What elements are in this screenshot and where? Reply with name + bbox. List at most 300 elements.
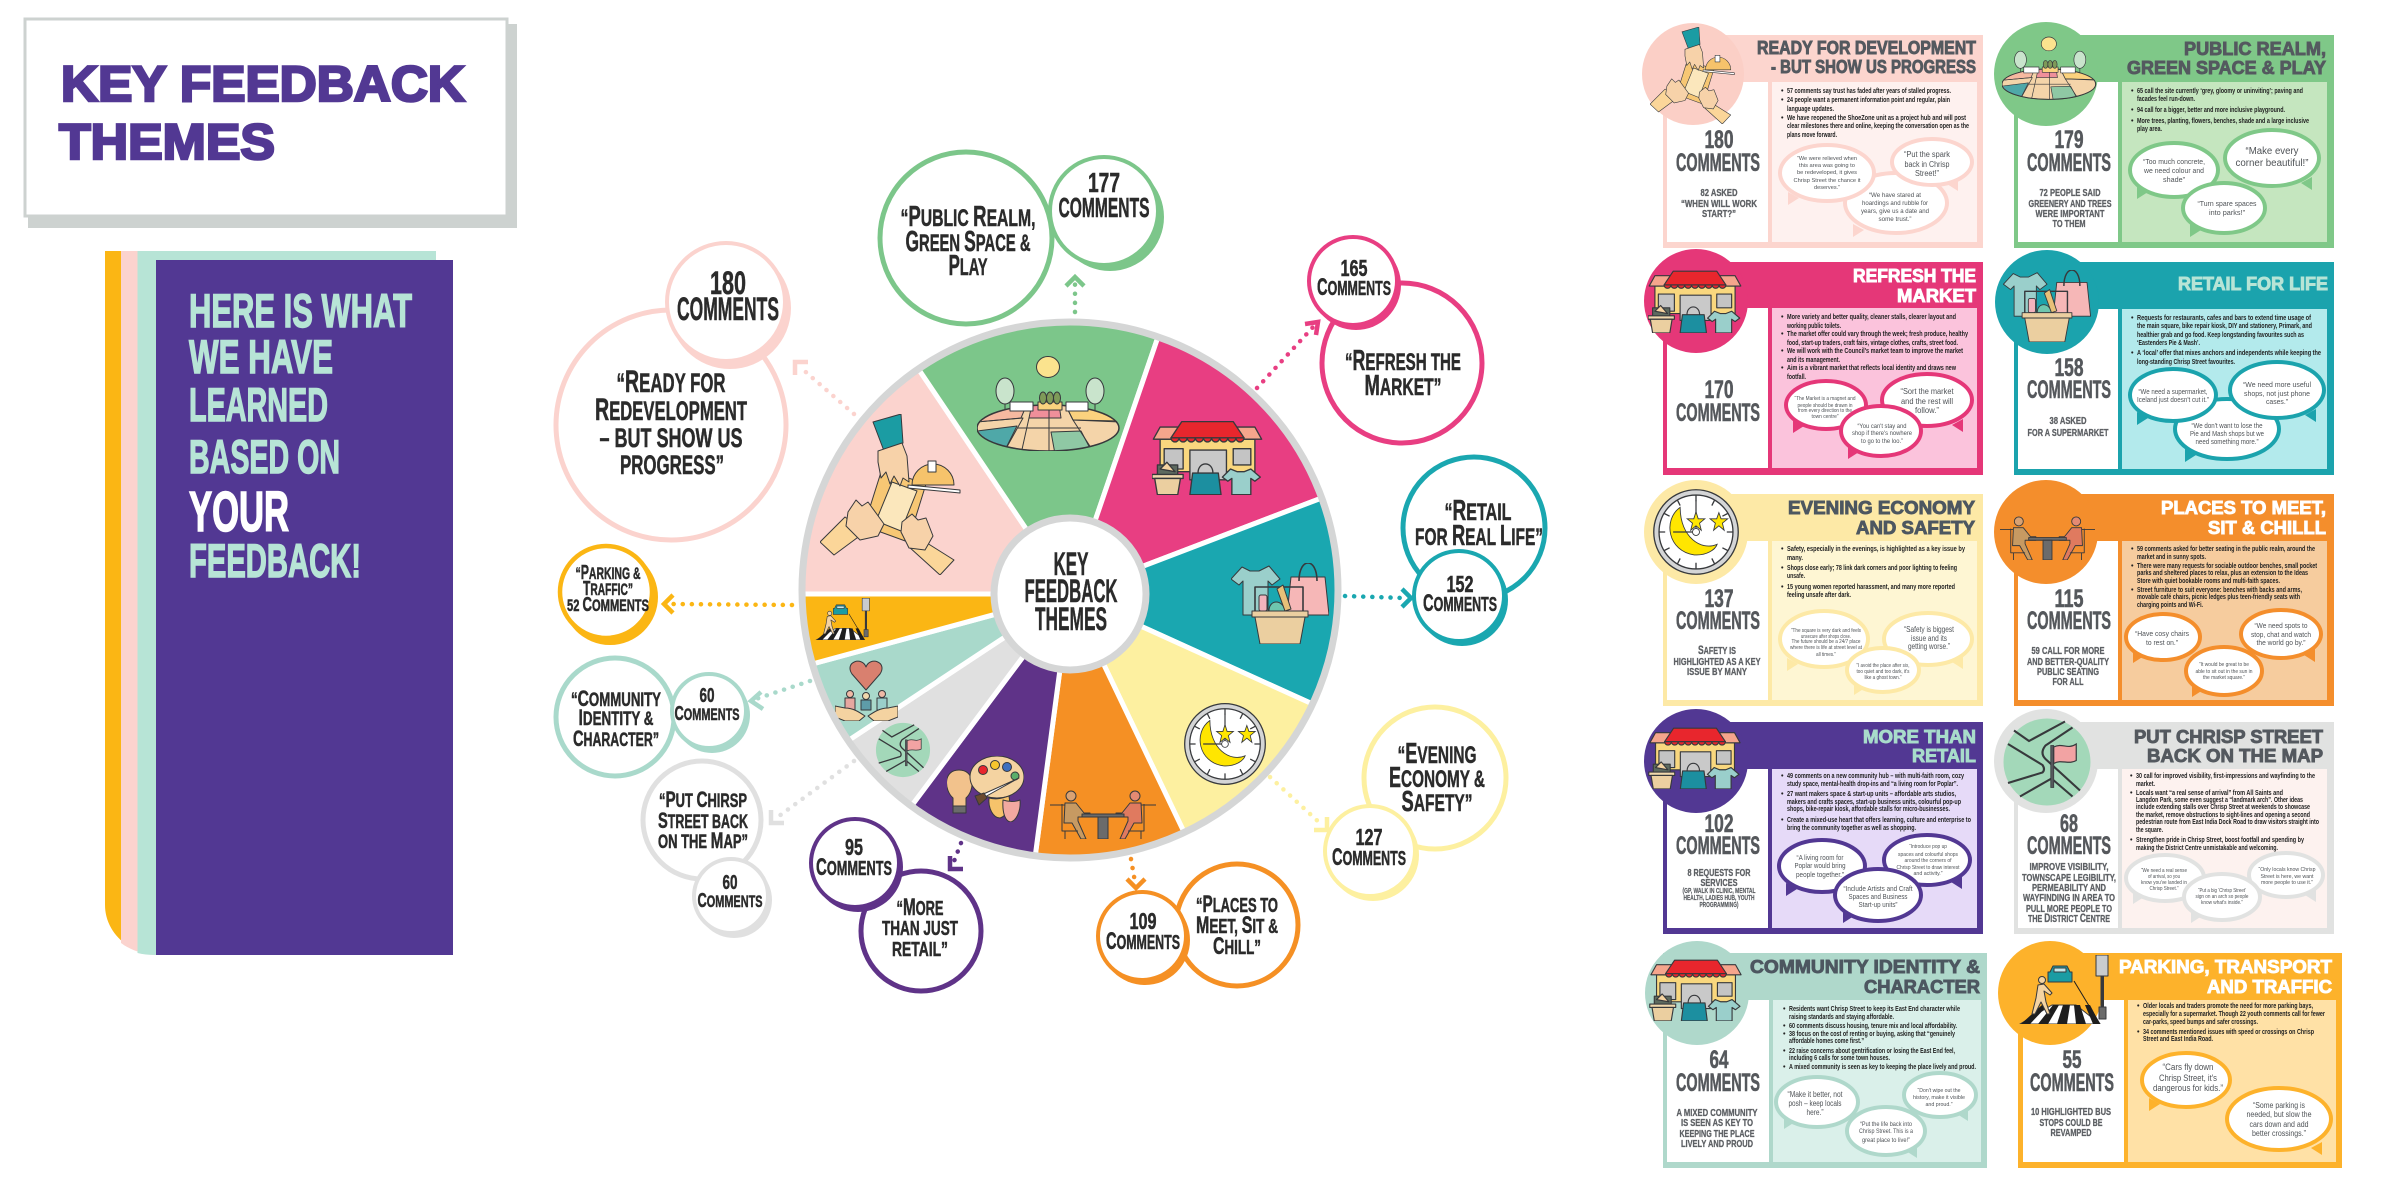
- callout: put chrisp street back on the map: [643, 761, 772, 938]
- stat: 180 comments: COMMENTS: [1676, 149, 1760, 177]
- bullet list: especially for a supermarket. Though 22 youth comments call for fewer: [2143, 1009, 2325, 1018]
- bullet list: many.: [1787, 553, 1803, 562]
- quote bubble: [2227, 1088, 2331, 1155]
- bullet list: A mixed community is seen as key to keeping the place lively and proud.: [1789, 1062, 1976, 1071]
- stat: 102 comments: COMMENTS: [1676, 832, 1760, 860]
- quote bubble: cases.”: [2266, 397, 2288, 406]
- quote bubble: “The square is very dark and feels: [1791, 628, 1861, 634]
- callout: evening economy: “EVENING: [1398, 738, 1476, 770]
- bullet list: language updates.: [1787, 104, 1834, 113]
- heading: [1853, 266, 1976, 306]
- bullet list: Street and East India Road.: [2143, 1034, 2213, 1043]
- quote bubble: all times.”: [1816, 652, 1836, 658]
- arrow: parking: [664, 595, 792, 613]
- quote bubble: Iceland just doesn't cut it.”: [2137, 397, 2210, 404]
- quote bubble: “Put the spark: [1904, 150, 1951, 159]
- quote bubble: [2175, 399, 2279, 462]
- quote bubble: [2142, 1053, 2230, 1111]
- bullet list: •: [2131, 313, 2134, 322]
- quote bubble: corner beautiful!”: [2236, 158, 2308, 169]
- quote bubble: cars down and add: [2250, 1120, 2308, 1129]
- heading: RETAIL: [1912, 746, 1976, 766]
- arrow: ready: [795, 362, 854, 414]
- callout: more than retail: COMMENTS: [816, 855, 892, 881]
- quote bubble: [1904, 1073, 1976, 1121]
- bullet list: The market offer could vary through the week; fresh produce, healthy: [1787, 329, 1968, 338]
- bullet list: There were many requests for sociable outdoor benches, small pocket: [2137, 561, 2317, 570]
- quote bubble: “Have cosy chairs: [2135, 629, 2189, 638]
- callout: retail for real life: FOR REAL LIFE”: [1415, 520, 1543, 552]
- stat: 158 comments: [2027, 354, 2111, 439]
- quote bubble: “We need a real sense: [2141, 868, 2187, 874]
- quote bubble: follow.”: [1915, 406, 1939, 415]
- quote bubble: people should be drawn in: [1798, 403, 1852, 409]
- quote bubble: where there is life at street level at: [1790, 645, 1863, 651]
- callout: retail for real life: “RETAIL: [1444, 495, 1512, 527]
- quote bubble: “Make every: [2246, 146, 2298, 157]
- stat: 68 comments: TOWNSCAPE LEGIBILITY,: [2022, 872, 2116, 884]
- arrow: chrisp street: [771, 761, 854, 823]
- quote bubble: Street!”: [1915, 169, 1939, 178]
- panel: here is what we have learned: LEARNED: [189, 378, 328, 431]
- heading: GREEN SPACE & PLAY: [2127, 58, 2326, 78]
- heading: BACK ON THE MAP: [2147, 746, 2323, 766]
- quote bubble: history, make it visible: [1913, 1095, 1965, 1101]
- stat: 64 comments: A MIXED COMMUNITY: [1676, 1107, 1758, 1119]
- quote bubble: [1884, 613, 1972, 669]
- bullet list: [2131, 544, 2317, 609]
- wheel hub: KEY: [1054, 546, 1088, 582]
- bullet list: play area.: [2137, 124, 2162, 133]
- bullet list: •: [2130, 835, 2133, 844]
- stat: 179 comments: 179: [2054, 126, 2084, 154]
- quote bubble: getting worse.”: [1908, 642, 1950, 651]
- callout: community identity: 60: [700, 685, 714, 707]
- quote bubble: from every direction to the: [1798, 408, 1852, 414]
- heading: MORE THAN: [1863, 727, 1976, 747]
- callout: community identity: CHARACTER”: [573, 726, 659, 751]
- quote bubble: shops, not just phone: [2244, 389, 2310, 398]
- quote bubble: “We need a supermarket,: [2138, 389, 2208, 396]
- wheel rim: [802, 322, 1338, 858]
- bullet list: •: [2131, 544, 2134, 553]
- bullet list: •: [2130, 788, 2133, 797]
- bullet list: We have reopened the ShoeZone unit as a project hub and will post: [1787, 113, 1966, 122]
- quote bubble: Poplar would bring: [1794, 861, 1846, 870]
- bullet list: [2131, 313, 2321, 366]
- quote bubble: Chrisp Street, it's: [2159, 1073, 2217, 1083]
- bullet list: 57 comments say trust has faded after years of stalled progress.: [1787, 86, 1951, 95]
- bullet list: market.: [2136, 779, 2155, 788]
- stat: 102 comments: 102: [1704, 810, 1734, 838]
- quote bubble: “It would be great to be: [2199, 662, 2249, 668]
- bullet list: 15 young women reported harassment, and many more reported: [1787, 582, 1955, 591]
- panel: here is what we have learned: BASED ON: [189, 430, 340, 483]
- bullet list: [1781, 544, 1965, 599]
- sector: parking and traffic: [806, 596, 994, 666]
- bullet list: Store with quiet bookable rooms and multi-faith spaces.: [2137, 576, 2280, 585]
- callout: ready for redevelopment: REDEVELOPMENT: [595, 391, 747, 427]
- quote bubble: [2126, 614, 2200, 663]
- stat: 137 comments: [1674, 585, 1760, 678]
- bullet list: working public toilets.: [1786, 321, 1841, 330]
- sector: put chrisp street on the map: [852, 640, 1024, 804]
- callout: ready for redevelopment: COMMENTS: [677, 291, 779, 327]
- heading: PARKING, TRANSPORT: [2119, 957, 2332, 977]
- quote bubble: back in Chrisp: [1904, 160, 1950, 169]
- bullet list: Shops close early; 78 link dark corners and poor lighting to feeling: [1787, 563, 1957, 572]
- quote bubble: years, give us a date and: [1861, 208, 1929, 215]
- quote bubble: and activity.”: [1914, 871, 1943, 877]
- title: [25, 19, 517, 228]
- stat: 64 comments: IS SEEN AS KEY TO: [1681, 1117, 1753, 1129]
- callout: ready for redevelopment: [556, 243, 791, 540]
- quote bubble: [2126, 855, 2204, 904]
- quote bubble: “Sort the market: [1900, 387, 1954, 396]
- quote bubble: sign on an arch so people: [2196, 894, 2249, 900]
- callout: more than retail: [811, 819, 981, 991]
- bullet list: the market, remove obstructions to sight-lines and opening a second: [2136, 810, 2310, 819]
- bullet list: food, start-up traders, craft fairs, vintage clothes, crafts, street food.: [1787, 338, 1958, 347]
- stat: 137 comments: HIGHLIGHTED AS A KEY: [1674, 656, 1760, 668]
- stat: 158 comments: COMMENTS: [2027, 376, 2111, 404]
- panel: put chrisp street back on the map: [1994, 709, 2334, 934]
- callout: put chrisp street back on the map: ON THE MAP”: [658, 828, 748, 853]
- bullet list: healthier grab and go food. Keep longstanding favourites such as: [2137, 330, 2304, 339]
- stat: 102 comments: [1676, 810, 1760, 909]
- quote bubble: [2130, 143, 2218, 199]
- stat: 64 comments: 64: [1710, 1046, 1729, 1074]
- bullet list: A ‘local’ offer that mixes anchors and independents while keeping the: [2137, 348, 2321, 357]
- bullet list: footfall.: [1787, 372, 1806, 381]
- bullet list: the square.: [2136, 825, 2163, 834]
- callout: retail for real life: COMMENTS: [1423, 591, 1497, 617]
- sector: places to meet: [1038, 664, 1185, 854]
- panel: here is what we have learned: FEEDBACK!: [189, 534, 361, 587]
- callout: evening economy: ECONOMY &: [1389, 762, 1485, 794]
- quote bubble: better crossings.”: [2252, 1129, 2306, 1138]
- stat: 55 comments: 10 HIGHLIGHTED BUS: [2031, 1106, 2111, 1118]
- bullet list: Aim is a vibrant market that reflects local identity and draws new: [1787, 363, 1956, 372]
- bullet list: •: [2131, 86, 2134, 95]
- bullet list: •: [1781, 563, 1784, 572]
- callout: public realm: GREEN SPACE &: [906, 226, 1030, 258]
- stat: 115 comments: FOR ALL: [2052, 676, 2084, 688]
- callout: public realm: COMMENTS: [1058, 192, 1150, 223]
- bullet list: 27 want makers space & start-up units – affordable arts studios,: [1787, 789, 1956, 798]
- callout: more than retail: 95: [845, 834, 863, 860]
- quote bubble: around the corners of: [1904, 858, 1952, 864]
- quote bubble: “We need more useful: [2243, 380, 2311, 389]
- quote bubble: some trust.”: [1878, 216, 1912, 223]
- bullet list: pedestrian route from East India Dock Road to draw visitors straight into: [2136, 817, 2319, 826]
- stat: 68 comments: PULL MORE PEOPLE TO: [2026, 903, 2112, 915]
- callout: put chrisp street back on the map: 60: [722, 872, 738, 894]
- quote bubble: [2241, 610, 2321, 662]
- callout: parking and traffic: [560, 546, 658, 645]
- quote bubble: stop, chat and watch: [2251, 630, 2311, 639]
- callout: public realm: “PUBLIC REALM,: [900, 201, 1036, 233]
- callout: places to meet: “PLACES TO: [1196, 892, 1278, 918]
- bullet list: 65 call the site currently ‘grey, gloomy or uninviting’; paving and: [2137, 86, 2303, 95]
- bullet list: Requests for restaurants, cafes and bars to extend time usage of: [2137, 313, 2311, 322]
- stat: 170 comments: COMMENTS: [1676, 399, 1760, 427]
- bullet list: Strengthen pride in Chrisp Street, boost footfall and spending by: [2136, 835, 2304, 844]
- bullet list: •: [2131, 585, 2134, 594]
- bullet list: •: [1781, 312, 1784, 321]
- bullet list: 60 comments discuss housing, tenure mix and local affordability.: [1789, 1021, 1957, 1030]
- heading: [1788, 498, 1975, 538]
- stat: 55 comments: [2030, 1046, 2114, 1139]
- callout: community identity: “COMMUNITY: [571, 686, 661, 711]
- bullet list: •: [1783, 1021, 1786, 1030]
- stat: 102 comments: 8 REQUESTS FOR: [1688, 867, 1751, 879]
- panel: here is what we have learned: WE HAVE: [189, 330, 333, 383]
- stat: 180 comments: [1676, 126, 1760, 220]
- quote bubble: the world go by.”: [2256, 638, 2306, 647]
- stat: 68 comments: IMPROVE VISIBILITY,: [2030, 861, 2109, 873]
- stat: 102 comments: HEALTH, LADIES HUB, YOUTH: [1684, 893, 1754, 902]
- stat: 64 comments: LIVELY AND PROUD: [1681, 1138, 1753, 1150]
- stat: 179 comments: GREENERY AND TREES: [2028, 198, 2112, 210]
- stat: 64 comments: KEEPING THE PLACE: [1680, 1128, 1754, 1140]
- bullet list: long-standing Chrisp Street favourites.: [2137, 357, 2235, 366]
- quote bubble: this area was going to: [1799, 163, 1855, 169]
- bullet list: We will work with the Council's market team to improve the market: [1787, 346, 1963, 355]
- stat: 68 comments: COMMENTS: [2027, 832, 2111, 860]
- panel: more than retail: [1644, 709, 1983, 934]
- stat: 180 comments: START?”: [1702, 208, 1736, 220]
- bullet list: •: [2131, 348, 2134, 357]
- callout: places to meet: COMMENTS: [1106, 929, 1180, 955]
- callout: retail for real life: 152: [1446, 571, 1474, 597]
- bullet list: [1781, 771, 1971, 832]
- quote bubble: know what's inside.”: [2201, 900, 2243, 906]
- quote bubble: “Don't wipe out the: [1918, 1088, 1960, 1094]
- heading: AND TRAFFIC: [2207, 977, 2332, 997]
- heading: EVENING ECONOMY: [1788, 498, 1975, 518]
- arrow: market: [1257, 322, 1318, 388]
- stat: 170 comments: [1676, 376, 1760, 427]
- bullet list: •: [1781, 329, 1784, 338]
- quote bubble: [1882, 374, 1972, 432]
- quote bubble: dangerous for kids.”: [2153, 1083, 2223, 1093]
- bullet list: charging points and Wi-Fi.: [2137, 600, 2203, 609]
- quote bubble: [1786, 381, 1866, 433]
- bullet list: [1781, 312, 1968, 381]
- bullet list: 34 comments mentioned issues with speed or crossings on Chrisp: [2143, 1027, 2314, 1036]
- callout: places to meet: 109: [1130, 908, 1156, 934]
- quote bubble: and proud.”: [1926, 1102, 1953, 1108]
- quote bubble: posh – keep locals: [1788, 1099, 1842, 1108]
- quote bubble: shade”: [2163, 175, 2185, 184]
- quote bubble: Chrisp Street. This is a: [1859, 1129, 1914, 1135]
- bullet list: •: [1781, 363, 1784, 372]
- quote bubble: “Turn spare spaces: [2198, 201, 2257, 208]
- quote bubble: we need colour and: [2143, 166, 2204, 175]
- stat: 115 comments: AND BETTER-QUALITY: [2027, 656, 2109, 668]
- bullet list: Locals want “a real sense of arrival” from All Saints and: [2136, 788, 2283, 797]
- bullet list: 22 raise concerns about gentrification or losing the East End feel,: [1789, 1046, 1955, 1055]
- bullet list: shops, bike-repair kiosk, affordable stalls for micro-businesses.: [1787, 804, 1950, 813]
- stat: 180 comments: 82 ASKED: [1700, 187, 1738, 199]
- heading: CHARACTER: [1864, 977, 1980, 997]
- bullet list: •: [1781, 113, 1784, 122]
- stat: 115 comments: 59 CALL FOR MORE: [2032, 645, 2104, 657]
- quote bubble: to rest on.”: [2146, 638, 2178, 647]
- quote bubble: “Cars fly down: [2162, 1062, 2214, 1072]
- stat: 137 comments: SAFETY IS: [1698, 643, 1736, 657]
- quote bubble: [2230, 362, 2324, 422]
- bullet list: •: [2137, 1027, 2140, 1036]
- callout: places to meet: [1098, 864, 1298, 986]
- bullet list: •: [1781, 789, 1784, 798]
- quote bubble: “Introduce pop up: [1909, 844, 1947, 850]
- quote bubble: too quiet and too dark, it's: [1856, 669, 1910, 675]
- callout: put chrisp street back on the map: COMMENTS: [698, 890, 762, 912]
- quote bubble: “Some parking is: [2253, 1101, 2305, 1110]
- arrow: places: [1127, 859, 1145, 888]
- quote bubble: Street is here, we want: [2260, 874, 2314, 880]
- bullet list: [2131, 86, 2309, 133]
- callout: public realm: 177: [1088, 167, 1120, 198]
- quote bubble: [1847, 648, 1919, 695]
- heading: [1750, 957, 1980, 997]
- quote bubble: shop if there's nowhere: [1852, 430, 1912, 437]
- bullet list: 59 comments asked for better seating in the public realm, around the: [2137, 544, 2315, 553]
- bullet list: Residents want Chrisp Street to keep its East End character while: [1789, 1004, 1960, 1013]
- bullet list: [2137, 1001, 2325, 1043]
- panel: parking, transport and traffic: [1998, 941, 2342, 1168]
- stat: 68 comments: 68: [2060, 810, 2078, 838]
- heading: [1863, 727, 1976, 766]
- stat: 137 comments: ISSUE BY MANY: [1687, 666, 1747, 678]
- quote bubble: Chrisp Street the chance it: [1794, 178, 1861, 184]
- bullet list: •: [1781, 544, 1784, 553]
- wheel hub: THEMES: [1035, 601, 1107, 637]
- sector: community identity: [816, 617, 1002, 736]
- callout: ready for redevelopment: “READY FOR: [616, 363, 726, 399]
- heading: PLACES TO MEET,: [2161, 498, 2326, 518]
- bullet list: affordable homes come first.”: [1789, 1036, 1864, 1045]
- panel: here is what we have learned: YOUR: [189, 480, 289, 544]
- bullet list: •: [1781, 86, 1784, 95]
- arrow: public realm: [1066, 277, 1084, 312]
- quote bubble: town centre”: [1812, 414, 1839, 420]
- stat: 64 comments: COMMENTS: [1676, 1069, 1760, 1097]
- stat: 158 comments: FOR A SUPERMARKET: [2028, 427, 2109, 439]
- bullet list: •: [1781, 582, 1784, 591]
- stat: 179 comments: 72 PEOPLE SAID: [2040, 187, 2101, 199]
- callout: evening economy: COMMENTS: [1332, 845, 1406, 871]
- quote bubble: need something more.”: [2196, 439, 2259, 446]
- quote bubble: “Put the life back into: [1860, 1122, 1913, 1128]
- callout: public realm: PLAY: [948, 250, 988, 282]
- stat: 68 comments: WAYFINDING IN AREA TO: [2023, 892, 2115, 904]
- bullet list: 30 call for improved visibility, first-impressions and wayfinding to the: [2136, 771, 2315, 780]
- stat: 115 comments: PUBLIC SEATING: [2037, 666, 2099, 678]
- stat: 115 comments: [2027, 585, 2111, 688]
- bullet list: More variety and better quality, cleaner stalls, clearer layout and: [1787, 312, 1956, 321]
- callout: places to meet: MEET, SIT &: [1196, 913, 1278, 939]
- heading: - BUT SHOW US PROGRESS: [1771, 57, 1976, 77]
- arrow: more than retail: [950, 843, 963, 869]
- bullet list: 38 focus on the cost of renting or buying, asking that “genuinely: [1789, 1029, 1955, 1038]
- quote bubble: [1780, 145, 1874, 205]
- quote bubble: to go to the loo.”: [1861, 438, 1903, 445]
- quote bubble: unsecure after shops close.: [1801, 634, 1851, 640]
- quote bubble: “I avoid the place after six,: [1856, 663, 1910, 669]
- bullet list: More trees, planting, flowers, benches, shade and a large inclusive: [2137, 116, 2309, 125]
- callout: ready for redevelopment: 180: [710, 265, 746, 301]
- sector: ready for redevelopment: [806, 374, 1024, 592]
- bullet list: 94 call for a bigger, better and more inclusive playground.: [2137, 105, 2285, 114]
- panel: ready for development: [1642, 23, 1983, 248]
- arrow: retail: [1345, 589, 1411, 607]
- bullet list: and its management.: [1787, 355, 1840, 364]
- quote bubble: [1884, 835, 1970, 889]
- quote bubble: great place to live!”: [1862, 1138, 1910, 1144]
- panel: refresh the market: [1644, 249, 1983, 475]
- wheel hub: FEEDBACK: [1024, 573, 1118, 609]
- quote bubble: the market square.”: [2203, 675, 2245, 681]
- callout: refresh the market: [1309, 237, 1482, 443]
- quote bubble: [1847, 1107, 1925, 1158]
- bullet list: •: [1781, 346, 1784, 355]
- bullet list: ‘Eastenders Pie & Mash’.: [2137, 338, 2200, 347]
- quote bubble: “We were relieved when: [1797, 156, 1857, 162]
- quote bubble: [2183, 183, 2265, 237]
- panel: places to meet: [1994, 480, 2334, 706]
- bullet list: car-parks, speed bumps and safer crossings.: [2143, 1017, 2258, 1026]
- quote bubble: of arrival, so you: [2148, 874, 2180, 880]
- quote bubble: “Put a big ‘Chrisp Street’: [2198, 888, 2246, 894]
- callout: public realm: [880, 152, 1164, 324]
- quote bubble: The future should be a 24/7 place: [1792, 639, 1861, 645]
- stat: 179 comments: WERE IMPORTANT: [2036, 208, 2105, 220]
- quote bubble: like a ghost town.”: [1864, 675, 1902, 681]
- quote bubble: [1776, 1077, 1858, 1129]
- quote bubble: “A living room for: [1796, 853, 1844, 862]
- quote bubble: be redeveloped, it gives: [1797, 170, 1857, 176]
- bullet list: •: [1781, 815, 1784, 824]
- stat: 170 comments: 170: [1704, 376, 1734, 404]
- stat: 55 comments: REVAMPED: [2050, 1127, 2092, 1139]
- bullet list: •: [2137, 1001, 2140, 1010]
- callout: parking and traffic: TRAFFIC”: [583, 578, 633, 600]
- stat: 158 comments: 158: [2054, 354, 2084, 382]
- bullet list: include extending stalls over Chrisp Street at weekends to showcase: [2136, 802, 2310, 811]
- sector: more than retail: [916, 659, 1062, 852]
- stat: 137 comments: COMMENTS: [1676, 607, 1760, 635]
- quote bubble: people together.”: [1796, 870, 1844, 879]
- callout: ready for redevelopment: – BUT SHOW US: [600, 423, 742, 453]
- heading: PUT CHRISP STREET: [2134, 727, 2323, 747]
- heading: COMMUNITY IDENTITY &: [1750, 957, 1980, 977]
- heading: AND SAFETY: [1856, 518, 1975, 538]
- panel: here is what we have learned: HERE IS WHAT: [189, 284, 412, 337]
- stat: 55 comments: COMMENTS: [2030, 1069, 2114, 1097]
- stat: 102 comments: PROGRAMMING): [1700, 900, 1739, 909]
- quote bubble: Chrisp Street to draw interest: [1896, 865, 1960, 871]
- quote bubble: Chrisp Street.”: [2150, 886, 2179, 892]
- stat: 115 comments: COMMENTS: [2027, 607, 2111, 635]
- quote bubble: [2186, 647, 2262, 697]
- bullet list: •: [1781, 771, 1784, 780]
- panel: retail for life: [1995, 250, 2334, 475]
- bullet list: Street furniture to suit everyone: benches with backs and arms,: [2137, 585, 2302, 594]
- stat: 179 comments: [2027, 126, 2112, 230]
